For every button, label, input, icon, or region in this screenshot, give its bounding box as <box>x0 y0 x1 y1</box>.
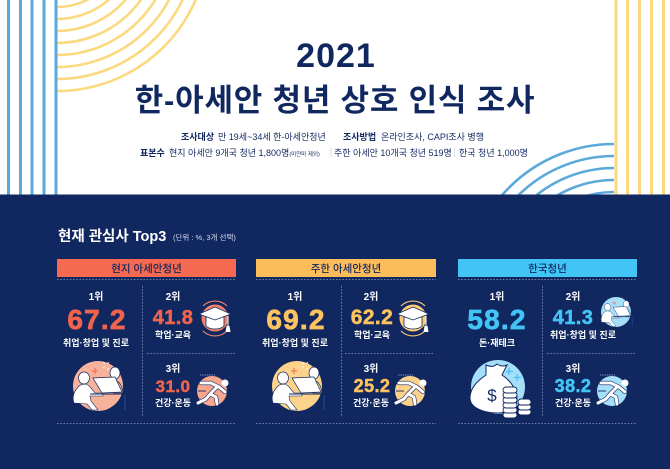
rank 3: 건강·운동 <box>555 398 591 408</box>
rank 2: 2위 <box>566 290 580 303</box>
rank 3: 3위 <box>364 362 378 375</box>
decoration: yellow vertical lines right <box>614 0 665 195</box>
navy section background <box>0 194 670 469</box>
rank 3: 건강·운동 <box>353 398 389 408</box>
decoration: white mask left of arcs <box>0 0 57 195</box>
rank 1: 취업·창업 및 진로 <box>63 337 129 348</box>
survey info <box>140 131 528 158</box>
rank 1: 58.2 <box>467 304 527 335</box>
rank 2 <box>351 290 393 340</box>
rank 2: 학업·교육 <box>155 329 191 340</box>
rank 1: 67.2 <box>67 304 127 335</box>
rank 3 <box>155 362 191 408</box>
rank 2: 41.8 <box>153 307 193 329</box>
panel header: 한국청년 <box>528 263 567 275</box>
rank 3: 25.2 <box>354 376 390 396</box>
survey info: 주한 아세안 10개국 청년 519명 <box>334 148 452 158</box>
rank 2 <box>153 290 193 340</box>
rank 3: 건강·운동 <box>155 398 191 408</box>
rank 3: 31.0 <box>156 377 190 396</box>
rank 1 <box>63 290 129 348</box>
panel header <box>57 259 236 277</box>
panel: 주한 아세안청년 <box>256 259 436 424</box>
rank 3: 3위 <box>566 362 580 375</box>
rank 3 <box>555 362 591 408</box>
title: 2021 <box>296 37 376 75</box>
icon: desk work <box>73 361 125 411</box>
section heading <box>58 228 236 245</box>
rank 1: 1위 <box>490 290 504 303</box>
rank 2: 41.3 <box>553 307 593 329</box>
rank 2: 62.2 <box>351 306 393 329</box>
icon: graduation cap <box>397 301 429 336</box>
rank 1: 돈·재테크 <box>479 337 515 348</box>
panel header: 현지 아세안청년 <box>111 263 182 275</box>
icon: runner <box>395 375 426 406</box>
icon: runner <box>597 375 628 406</box>
decoration: white mask right of arcs <box>614 0 670 195</box>
icon: desk work <box>272 361 324 411</box>
icon: runner <box>197 375 228 406</box>
rank 3: 3위 <box>166 362 180 375</box>
rank 1: 1위 <box>89 290 103 303</box>
title <box>135 37 535 118</box>
rank 3 <box>353 362 390 408</box>
survey info: 온라인조사, CAPI조사 병행 <box>381 131 484 142</box>
decoration: blue vertical lines left <box>7 0 58 195</box>
icon: money bag and coins: $ <box>487 386 497 405</box>
header background <box>0 0 670 195</box>
rank 1: 취업·창업 및 진로 <box>262 337 328 348</box>
icon: desk work small <box>601 297 632 327</box>
rank 2: 2위 <box>364 290 378 303</box>
rank 2: 학업·교육 <box>354 329 390 340</box>
rank 1 <box>467 290 527 348</box>
panel: 한국청년 <box>458 259 637 424</box>
icon: money bag and coins <box>470 360 531 418</box>
survey info: 한국 청년 1,000명 <box>459 148 528 158</box>
section heading: 현재 관심사 Top3 <box>58 228 166 245</box>
rank 1: 69.2 <box>266 304 326 335</box>
survey info: 조사대상 <box>181 131 215 142</box>
decoration: blue arcs bottom right <box>466 144 670 440</box>
panel: 현지 아세안청년 <box>57 259 236 424</box>
rank 2: 2위 <box>166 290 180 303</box>
survey info: 조사방법 <box>343 131 376 142</box>
rank 1 <box>262 290 328 348</box>
survey info: 표본수 <box>140 148 165 158</box>
rank 2: 취업·창업 및 진로 <box>550 329 616 340</box>
panel header <box>256 259 436 277</box>
panel header <box>458 259 637 277</box>
section heading: (단위 : %, 3개 선택) <box>173 232 236 242</box>
title: 한-아세안 청년 상호 인식 조사 <box>135 83 535 118</box>
panel header: 주한 아세안청년 <box>311 263 381 275</box>
decoration: yellow arcs top left <box>0 0 208 91</box>
rank 2 <box>550 290 616 340</box>
rank 1: 1위 <box>288 290 302 303</box>
rank 3: 38.2 <box>555 376 591 396</box>
survey info: 현지 아세안 9개국 청년 1,800명(미얀마 제외) <box>169 148 320 158</box>
survey info: 만 19세~34세 한-아세안청년 <box>218 132 326 142</box>
icon: graduation cap <box>199 301 231 336</box>
